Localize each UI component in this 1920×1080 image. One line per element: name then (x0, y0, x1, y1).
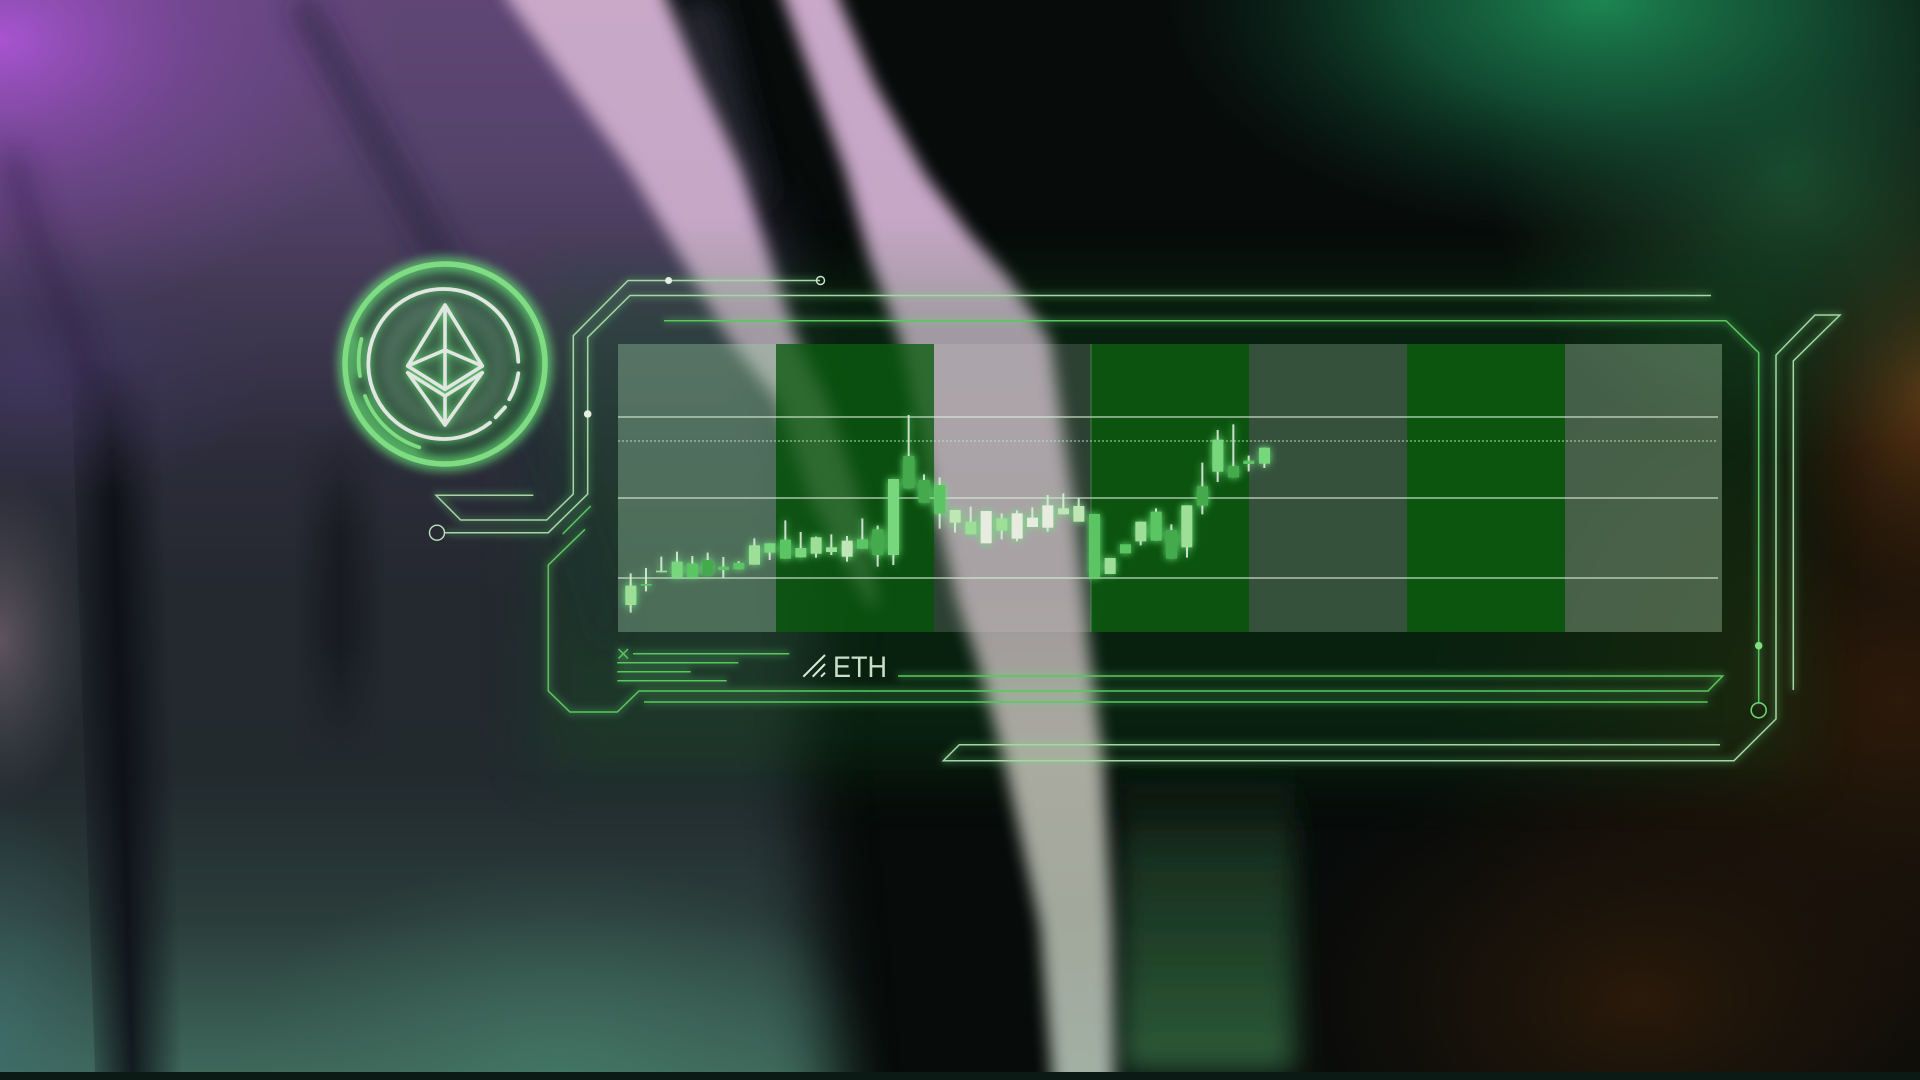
icon: ethereum coin (345, 264, 545, 464)
panel: striped chart background (618, 344, 1722, 632)
candlestick chart (625, 415, 1270, 613)
inner white ring and ethereum diamond (368, 289, 518, 439)
label: ETH (803, 651, 887, 684)
circuit nodes (430, 276, 1766, 718)
outer green ring (345, 264, 545, 464)
chart grid lines (618, 344, 1718, 632)
circuit frame lines (436, 280, 1840, 761)
label: ETH: ETH (833, 651, 887, 684)
